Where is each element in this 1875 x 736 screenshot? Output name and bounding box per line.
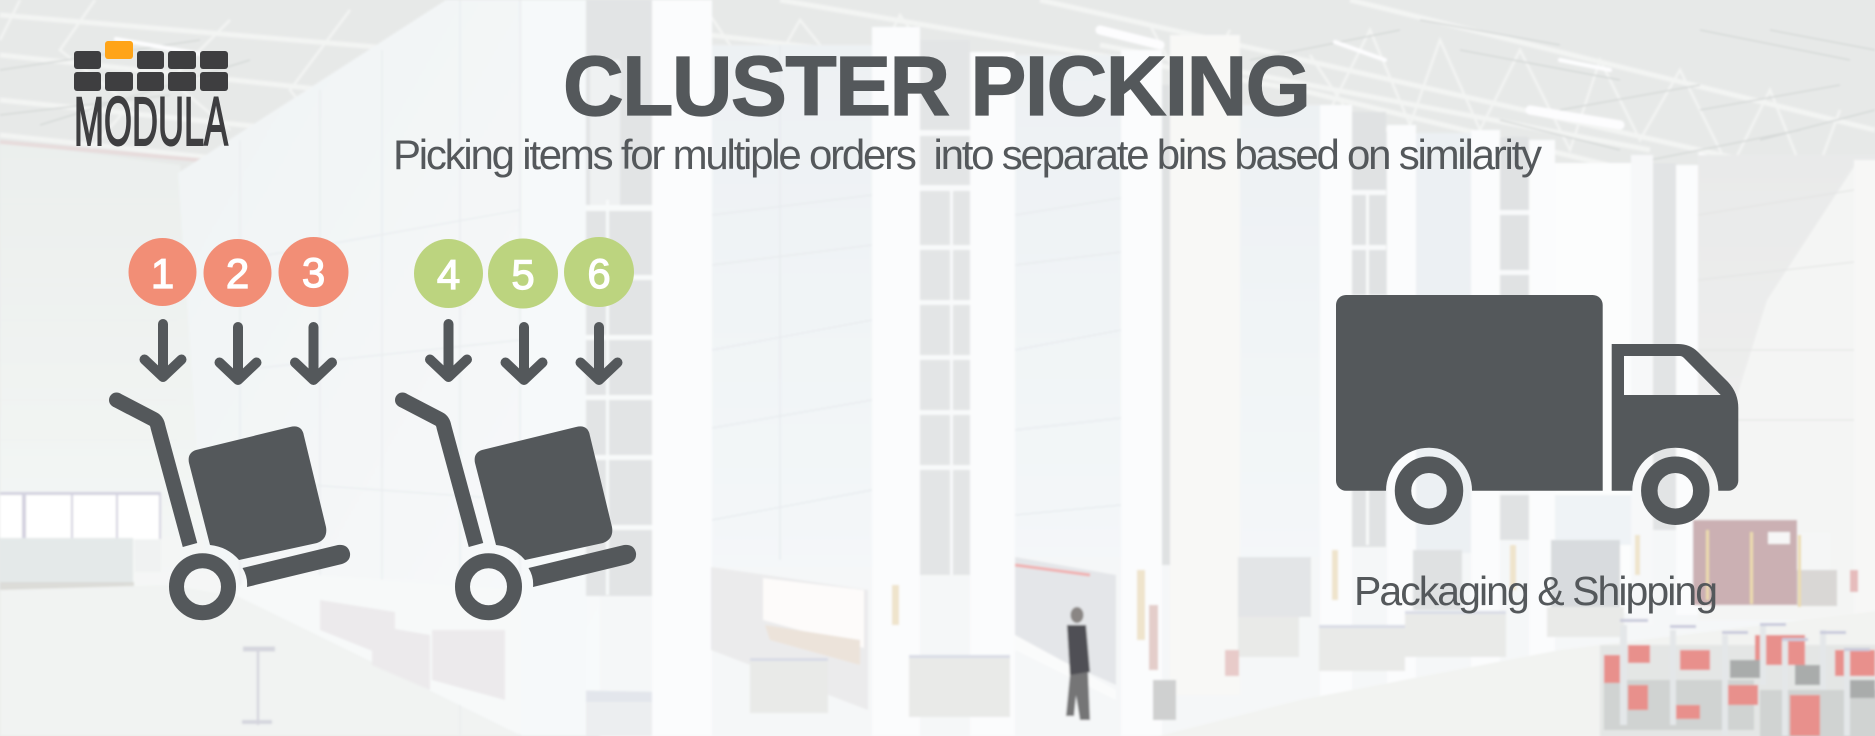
strip E — [1500, 137, 1529, 540]
lower right floor — [1120, 610, 1875, 736]
order group: orders 1 to 3 — [128, 237, 348, 307]
order badge 6: 6 — [587, 250, 611, 297]
fire cabinets — [1693, 520, 1797, 605]
strip D — [1352, 112, 1386, 547]
strip F — [1653, 163, 1676, 530]
order badge 1: 1 — [151, 250, 174, 297]
arrows into carts — [144, 324, 618, 380]
order badge 5: 5 — [511, 251, 535, 298]
floor left — [0, 585, 522, 736]
order badge 3: 3 — [302, 249, 325, 296]
icon: hand truck 1 — [109, 392, 350, 613]
arrow 2 — [220, 327, 256, 380]
order group: orders 4 to 6 — [414, 237, 634, 308]
long side wall — [178, 0, 600, 736]
logo wordmark: MODULA — [74, 83, 228, 160]
pick carts — [1600, 619, 1875, 736]
logo orange block — [105, 41, 133, 59]
back wall — [1698, 155, 1875, 620]
subtitle: Picking items for multiple orders into separate bins based on similarity — [393, 131, 1542, 178]
icon: hand truck 2 — [395, 392, 636, 613]
title: CLUSTER PICKING — [563, 39, 1311, 133]
strip A — [586, 0, 652, 596]
order badge 1 — [128, 238, 196, 306]
tags — [892, 535, 1640, 640]
person — [1066, 607, 1090, 720]
tower columns — [522, 0, 586, 736]
order badge 5 — [488, 238, 558, 308]
arrow 5 — [506, 327, 542, 380]
order badge 6 — [564, 237, 634, 307]
stand — [242, 649, 275, 725]
order badge 4 — [414, 239, 483, 308]
arrow 1 — [144, 324, 182, 377]
icon: delivery truck — [1336, 295, 1738, 517]
order badge 2: 2 — [226, 250, 249, 297]
order badge 2 — [204, 239, 272, 307]
label: packaging and shipping: Packaging & Shipping — [1354, 568, 1718, 614]
strip B — [920, 40, 970, 575]
logo grid blocks — [74, 51, 228, 91]
arrow 3 — [295, 327, 332, 380]
logo: Modula — [74, 41, 228, 160]
arrow 4 — [430, 324, 467, 377]
arrow 6 — [580, 327, 618, 380]
order badge 4: 4 — [437, 251, 460, 298]
ceiling lights — [46, 30, 1870, 205]
carts — [750, 607, 1624, 717]
left windows — [0, 492, 161, 539]
order badge 3 — [278, 237, 348, 307]
drawer openings — [711, 567, 868, 710]
left wall — [0, 142, 240, 600]
